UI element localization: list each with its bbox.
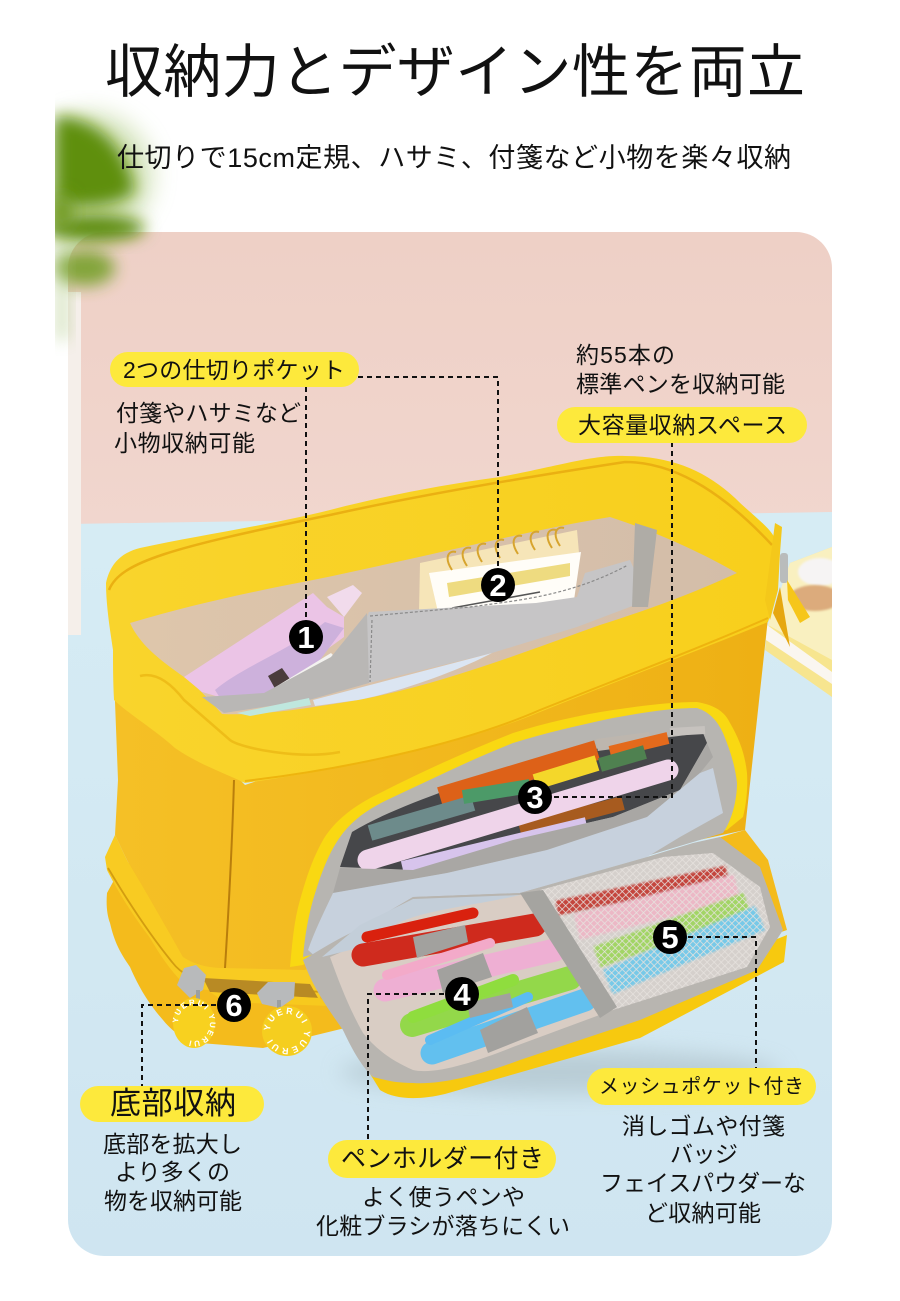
bag main body — [113, 618, 768, 970]
notepad on the table — [765, 547, 832, 697]
zipper pull left: YUERUI YUERUI — [172, 1000, 216, 1047]
text: pocket description: 付箋やハサミなど — [116, 400, 301, 426]
label: bottom storage — [80, 1086, 264, 1122]
zipper pull right — [257, 982, 312, 1056]
dashed leader lines — [142, 377, 756, 1140]
text: mesh pocket description — [600, 1113, 806, 1226]
text: pen holder description: よく使うペンや — [362, 1184, 525, 1210]
marker 3: 3 — [526, 780, 544, 815]
pocket dark inside — [340, 733, 707, 870]
pens in pocket — [440, 750, 597, 797]
marker 1 — [289, 620, 323, 655]
marker 2 — [481, 568, 515, 603]
text: capacity description — [576, 342, 785, 397]
text: bottom storage description: 底部を拡大し — [103, 1131, 242, 1157]
correction tape in pocket 1 — [184, 585, 362, 706]
text: pocket description — [114, 400, 301, 456]
label: two divider pockets: 2つの仕切りポケット — [123, 357, 345, 383]
text: pocket description: 小物収納可能 — [114, 430, 255, 456]
zipper pull left — [172, 965, 216, 1048]
marker 6 — [217, 988, 251, 1023]
label: pen holder: ペンホルダー付き — [341, 1145, 544, 1173]
grey band under pens — [333, 743, 713, 893]
text: pen holder description: 化粧ブラシが落ちにくい — [316, 1213, 570, 1239]
marker 4: 4 — [453, 977, 471, 1012]
text: mesh pocket description: フェイスパウダーな — [600, 1170, 806, 1196]
flap pens — [363, 913, 585, 1053]
text: bottom storage description — [103, 1131, 242, 1214]
title: 収納力とデザイン性を両立 — [105, 40, 805, 105]
text: mesh pocket description: バッジ — [670, 1141, 738, 1167]
bag shadow — [340, 1050, 780, 1094]
marker 1: 1 — [297, 620, 315, 655]
label: large capacity — [557, 407, 807, 443]
text: capacity description: 標準ペンを収納可能 — [576, 371, 785, 397]
subtitle: 仕切りで15cm定規、ハサミ、付箋など小物を楽々収納 — [117, 143, 791, 173]
text: bottom storage description: より多くの — [115, 1159, 230, 1185]
label: mesh pocket — [587, 1068, 816, 1105]
text: mesh pocket description: ど収納可能 — [645, 1200, 761, 1226]
marker 6: 6 — [225, 988, 243, 1023]
marker 5: 5 — [661, 920, 679, 955]
blurred leaf decoration — [28, 113, 152, 340]
label: large capacity: 大容量収納スペース — [578, 412, 787, 438]
lower bulge of bag — [107, 830, 787, 1048]
mesh pocket — [520, 853, 770, 1018]
text: capacity description: 約55本の — [576, 342, 675, 368]
zipper pull right: YUERUI YUERUI — [264, 1008, 310, 1054]
text: mesh pocket description: 消しゴムや付箋 — [622, 1113, 785, 1139]
lower zipper band — [105, 835, 325, 998]
label: mesh pocket: メッシュポケット付き — [599, 1075, 804, 1098]
grey inner pockets — [202, 523, 657, 716]
side seam — [225, 780, 234, 968]
label: two divider pockets — [110, 352, 359, 387]
label: bottom storage: 底部収納 — [110, 1086, 236, 1121]
upper rim fabric — [106, 456, 778, 783]
front flap yellow edge — [343, 935, 787, 1098]
flap lining — [330, 893, 613, 1071]
pencil case illustration — [105, 456, 810, 1098]
notebook — [419, 528, 581, 612]
white stand at left — [68, 292, 81, 635]
marker 5 — [653, 920, 687, 955]
bag interior — [130, 517, 737, 714]
background scene panel — [68, 232, 842, 1256]
marker 4 — [445, 977, 479, 1012]
marker 3 — [518, 780, 552, 815]
zipper stitching on rim — [109, 462, 772, 590]
upper pocket opening — [290, 702, 747, 967]
text: bottom storage description: 物を収納可能 — [104, 1188, 242, 1214]
marker 2: 2 — [489, 568, 507, 603]
front flap grey border — [303, 837, 783, 1083]
label: pen holder — [328, 1140, 556, 1178]
right zipper pull — [765, 523, 810, 647]
lining — [308, 768, 723, 958]
text: pen holder description — [316, 1184, 570, 1239]
